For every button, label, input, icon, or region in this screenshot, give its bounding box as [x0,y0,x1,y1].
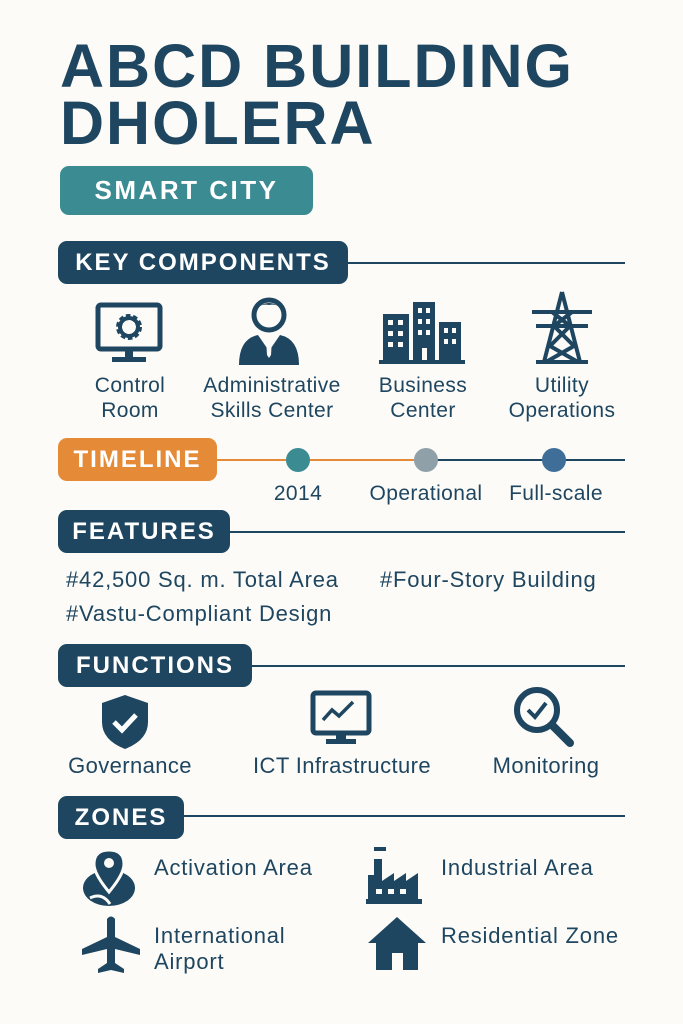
zone: international airport: International [154,923,286,948]
features text: #42,500 Sq. m. Total Area [66,567,339,592]
header: timeline: TIMELINE [74,446,202,472]
header: key components [58,241,348,284]
text: Full-scale [509,482,603,505]
header: features: FEATURES [72,518,216,544]
icon: monitoring magnifier [514,687,574,747]
zone: international airport: Airport [154,949,224,974]
text: Center [390,399,456,422]
labels: key components [95,374,165,422]
icon: utility tower [532,292,592,364]
title [60,32,574,157]
icon: governance shield [102,695,148,749]
labels: functions: Governance [68,753,192,778]
zone: residential zone: Residential Zone [441,923,619,948]
labels: key components: Control [95,374,165,397]
header: zones [58,796,184,839]
badge: smart city: SMART CITY [95,175,278,205]
zone: activation area: Activation Area [154,855,313,880]
text: Monitoring [493,753,599,778]
header: key components: KEY COMPONENTS [75,248,331,276]
labels: key components: Room [101,399,159,422]
title: DHOLERA [60,89,376,157]
header: features [58,510,230,553]
text: Business [379,374,467,397]
header: timeline [58,438,217,481]
icon: administrative [239,298,299,365]
zone: international airport [82,916,286,974]
timeline dots [286,448,310,472]
text: Utility [535,374,589,397]
text: Skills Center [210,399,334,422]
icon: control room [96,302,162,362]
text: Administrative [203,374,341,397]
zone: residential zone [368,917,619,970]
text: Operational [370,482,482,505]
title: ABCD BUILDING [60,32,574,100]
text: Operations [509,399,615,422]
zone: industrial area [366,847,594,904]
zone: industrial area: Industrial Area [441,855,594,880]
header: zones: ZONES [75,804,167,830]
icon: business center [379,302,465,364]
timeline track [217,459,417,461]
header: functions [58,644,252,687]
header: functions: FUNCTIONS [76,652,234,678]
badge: smart city [60,166,313,215]
text: #Vastu-Compliant Design [66,601,332,626]
zone: activation area [83,852,313,906]
text: #Four-Story Building [380,567,597,592]
timeline labels: 2014 [274,482,322,505]
icon: ict monitor [310,690,372,744]
text: ICT Infrastructure [253,753,431,778]
